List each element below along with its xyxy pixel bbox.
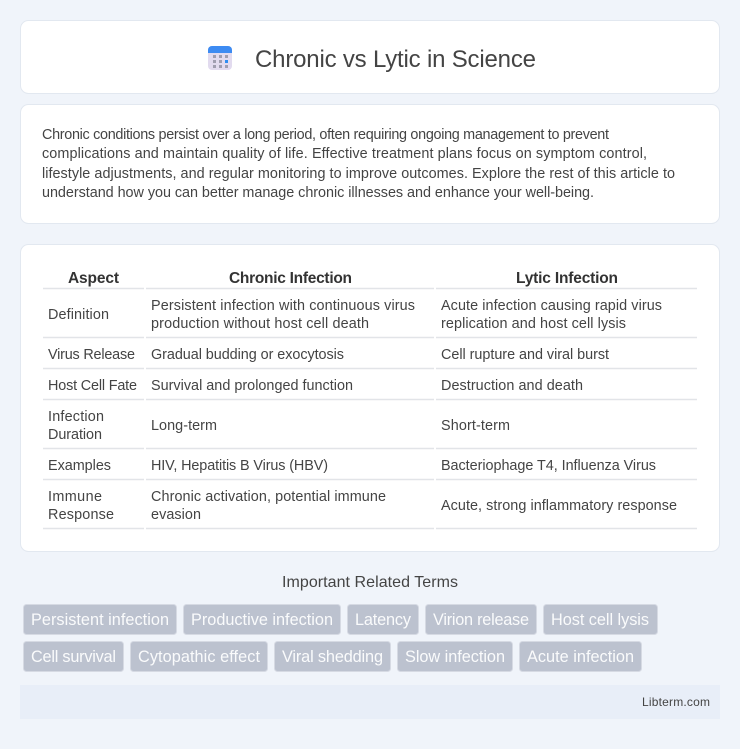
table rows <box>48 298 677 523</box>
row: examples: Examples <box>48 458 111 474</box>
row: immune response: Response <box>48 507 114 523</box>
row: infection duration: Infection <box>48 409 104 425</box>
row: host cell fate: Survival and prolonged function <box>151 378 353 394</box>
row: host cell fate: Host Cell Fate <box>48 378 137 394</box>
tag: Productive infection <box>184 604 340 634</box>
table header: Chronic Infection <box>229 270 352 287</box>
tag: Latency: Latency <box>355 611 412 629</box>
tag: Persistent infection <box>24 604 176 634</box>
tag: Acute infection <box>520 642 642 672</box>
row: virus release <box>48 347 609 363</box>
row: immune response: Chronic activation, potential immune <box>151 489 386 505</box>
row: infection duration: Duration <box>48 427 102 443</box>
table header: Aspect <box>68 270 119 287</box>
tag: Productive infection: Productive infection <box>191 611 333 629</box>
tag: Viral shedding: Viral shedding <box>282 648 383 666</box>
row: definition: production without host cell death <box>151 316 369 332</box>
title: Chronic vs Lytic in Science <box>255 46 536 73</box>
tag: Persistent infection: Persistent infection <box>31 611 169 629</box>
footer credit: Libterm.com <box>642 695 710 709</box>
tag: Virion release: Virion release <box>433 611 529 629</box>
tag: Host cell lysis <box>544 604 658 634</box>
text block: introduction <box>42 127 675 201</box>
tag: Host cell lysis: Host cell lysis <box>551 611 649 629</box>
text block: introduction: complications and maintain quality of life. Effective treatment plans focus on symptom control, <box>42 146 647 162</box>
row: definition: replication and host cell lysis <box>441 316 626 332</box>
tag: Cell survival <box>24 642 124 672</box>
panel: introduction <box>20 104 720 224</box>
row: immune response <box>48 489 677 523</box>
tag: Virion release <box>426 604 536 634</box>
row: virus release: Cell rupture and viral burst <box>441 347 609 363</box>
panel: related term tags <box>24 604 658 672</box>
row: immune response: evasion <box>151 507 201 523</box>
row: immune response: Immune <box>48 489 102 505</box>
row: infection duration <box>48 409 510 443</box>
row: immune response: Acute, strong inflammatory response <box>441 498 677 514</box>
tag: Cytopathic effect: Cytopathic effect <box>138 648 260 666</box>
row: host cell fate: Destruction and death <box>441 378 583 394</box>
row: definition: Definition <box>48 307 109 323</box>
tag: Slow infection: Slow infection <box>405 648 505 666</box>
row: examples: Bacteriophage T4, Influenza Virus <box>441 458 656 474</box>
row: infection duration: Long-term <box>151 418 217 434</box>
tag: Slow infection <box>398 642 512 672</box>
row: definition: Persistent infection with continuous virus <box>151 298 415 314</box>
row: infection duration: Short-term <box>441 418 510 434</box>
tag: Latency <box>348 604 418 634</box>
row: virus release: Gradual budding or exocytosis <box>151 347 344 363</box>
row: virus release: Virus Release <box>48 347 135 363</box>
tag: Acute infection: Acute infection <box>527 648 634 666</box>
row: examples: HIV, Hepatitis B Virus (HBV) <box>151 458 328 474</box>
table header <box>68 270 618 287</box>
footer <box>20 685 720 719</box>
tag: Cytopathic effect <box>130 642 268 672</box>
panel: header <box>20 20 720 94</box>
row: examples <box>48 458 656 474</box>
tag: Viral shedding <box>274 642 390 672</box>
text block: introduction: lifestyle adjustments, and regular monitoring to improve outcomes. Explore the rest of this article to <box>42 166 675 182</box>
tag: Cell survival: Cell survival <box>31 648 116 666</box>
text block: introduction: Chronic conditions persist over a long period, often requiring ongoing management to prevent <box>42 127 609 143</box>
table header: Lytic Infection <box>516 270 618 287</box>
heading: related terms: Important Related Terms <box>282 574 458 591</box>
row: definition: Acute infection causing rapid virus <box>441 298 662 314</box>
panel: comparison table <box>20 244 720 552</box>
row: host cell fate <box>48 378 583 394</box>
text block: introduction: understand how you can better manage chronic illnesses and enhance your well-being. <box>42 185 594 201</box>
icon: calendar <box>208 46 232 70</box>
row: definition <box>48 298 662 332</box>
